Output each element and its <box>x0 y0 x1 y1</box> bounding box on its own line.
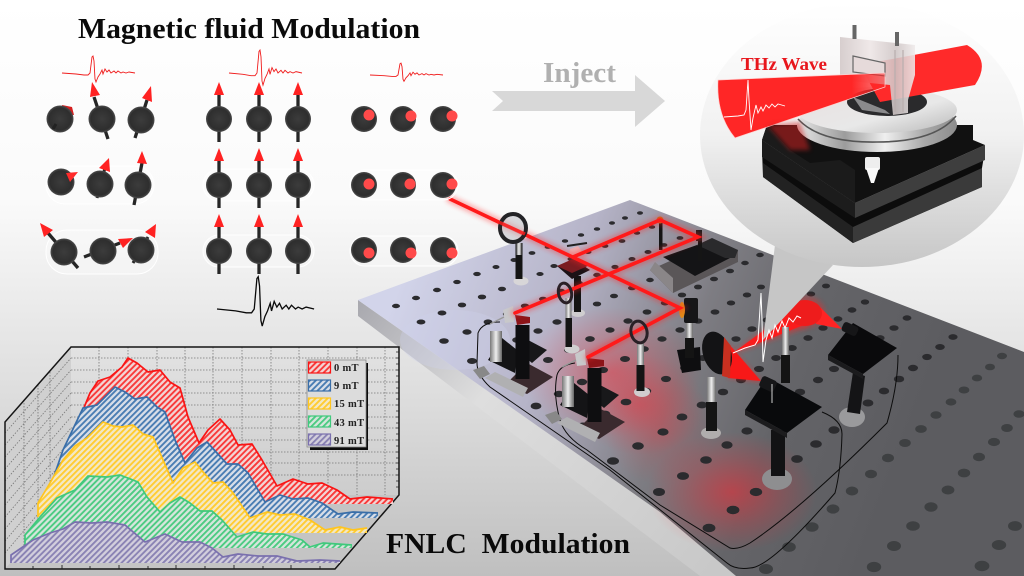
splitter with post <box>557 243 590 317</box>
panel: optical table <box>358 200 1024 576</box>
THz beam right half <box>860 45 982 102</box>
chart frame <box>5 347 399 569</box>
chart legend: 43 mT <box>334 418 364 429</box>
line: 0 mT <box>83 358 393 499</box>
arrow: inject <box>492 75 665 127</box>
line: 43 mT <box>25 475 352 547</box>
label: THz Wave: THz Wave <box>741 54 827 74</box>
line: 91 mT <box>11 522 340 563</box>
series: 9 mT <box>52 387 378 518</box>
pulse: disordered state <box>62 56 135 82</box>
sphere row 2 <box>48 151 152 205</box>
rotation ring <box>797 87 957 152</box>
chart legend: 91 mT <box>334 436 364 447</box>
stage centre <box>545 349 625 442</box>
heading: FNLC Modulation: FNLC Modulation <box>386 528 630 560</box>
rear pole <box>781 327 790 383</box>
line: 15 mT <box>38 422 367 530</box>
parabolic mirror <box>697 328 737 439</box>
lens rings <box>492 214 649 344</box>
stage plates <box>762 125 985 243</box>
chart legend: 15 mT <box>334 399 364 410</box>
pulse: transverse state <box>370 63 443 81</box>
stage left <box>473 306 553 397</box>
panel: magnetic fluid, aligned column <box>203 82 314 274</box>
panel: magnetic fluid, transverse column <box>350 106 458 266</box>
chart legend: 9 mT <box>334 381 359 392</box>
title: Magnetic fluid Modulation: Magnetic fluid Modulation <box>78 13 420 45</box>
emitter front <box>745 375 822 490</box>
series: 15 mT <box>38 422 367 533</box>
white pulse in bubble <box>724 80 785 130</box>
red shadow falloff <box>767 122 810 150</box>
sample holder <box>840 25 915 115</box>
emitter right <box>828 321 897 427</box>
optical stage right, rear translation stage <box>650 216 738 293</box>
series: 91 mT <box>11 522 340 563</box>
panel: 3D chart <box>5 347 399 569</box>
sphere row 1 <box>46 82 154 139</box>
orange mirror <box>677 298 701 373</box>
chart legend: 0 mT <box>334 363 359 374</box>
wires on the table <box>477 322 898 568</box>
sphere row 3 <box>40 223 156 268</box>
red laser beams <box>450 199 698 357</box>
series: 43 mT <box>25 475 352 548</box>
callout bubble: sample stage <box>700 3 1024 340</box>
panel: magnetic fluid, disordered column <box>40 82 158 274</box>
lens post front <box>634 343 650 397</box>
pulse: aligned state <box>229 50 302 85</box>
heading: Inject: Inject <box>543 57 616 89</box>
THz beam left half <box>718 73 885 138</box>
THz cone beams <box>728 296 842 382</box>
series: 0 mT <box>83 358 393 504</box>
lens post middle <box>564 298 580 354</box>
line: 9 mT <box>52 387 378 514</box>
white pulse on table <box>733 293 801 362</box>
pulse: black reference <box>217 277 314 326</box>
chart legend <box>307 360 368 450</box>
pin <box>865 157 880 183</box>
lens post rear <box>514 243 528 286</box>
